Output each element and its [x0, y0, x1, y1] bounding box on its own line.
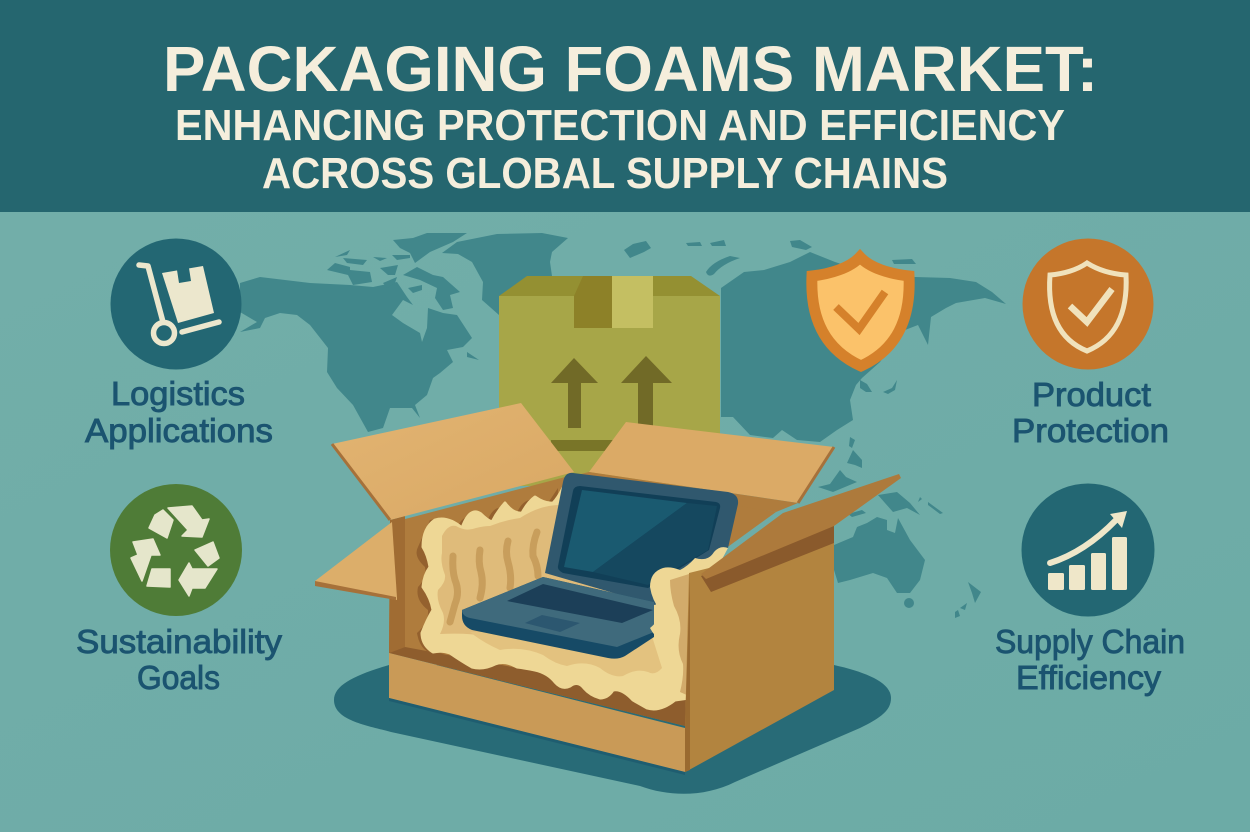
back left flap: [332, 403, 574, 520]
right flap: [701, 474, 901, 579]
world map: [240, 233, 1006, 618]
foam folds: [450, 532, 538, 622]
foam under laptop: [470, 630, 662, 676]
up arrows: [551, 356, 672, 451]
shield icon: [812, 257, 909, 366]
label: Supply Chain: [995, 623, 1185, 660]
ground shadow: [334, 665, 891, 794]
laptop base: [462, 577, 654, 659]
label: Sustainability: [76, 623, 283, 660]
right flap shade: [701, 524, 834, 592]
title line 1: PACKAGING FOAMS MARKET:: [163, 33, 1098, 105]
title line 2: ENHANCING PROTECTION AND EFFICIENCY: [175, 101, 1065, 150]
label: Applications: [85, 412, 273, 449]
light tape: [612, 276, 653, 328]
label: [1012, 376, 1169, 449]
label: Efficiency: [1016, 659, 1162, 696]
back right flap: [589, 422, 834, 503]
label: Protection: [1012, 412, 1169, 449]
label: [76, 623, 283, 696]
left side flap: [315, 522, 397, 600]
box interior: [389, 475, 776, 727]
icon: shield check: [1022, 238, 1154, 370]
label: Logistics: [111, 375, 245, 412]
title: [163, 33, 1098, 198]
touchpad: [525, 615, 580, 632]
screen glare: [564, 490, 687, 572]
title line 3: ACROSS GLOBAL SUPPLY CHAINS: [262, 149, 948, 198]
foam back: [422, 488, 689, 709]
box top: [499, 276, 720, 296]
banner: [0, 0, 1250, 212]
box right wall: [685, 537, 834, 772]
icon: hand cart: [110, 238, 242, 370]
open cardboard box with laptop: [315, 403, 901, 794]
icon: growth chart: [1022, 484, 1154, 616]
icon: recycle: [110, 484, 242, 616]
label: Product: [1032, 376, 1151, 413]
foam shadow: [417, 488, 558, 654]
foam inner: [438, 505, 650, 650]
panel: sustainability goals: [76, 484, 283, 696]
label: Goals: [137, 659, 220, 696]
foam right piece: [650, 547, 728, 700]
label: [85, 375, 273, 449]
dark tape: [574, 276, 612, 328]
background: [0, 212, 1250, 832]
panel: product protection: [1012, 238, 1169, 449]
laptop screen: [545, 473, 738, 605]
background shipping box: [499, 276, 720, 486]
laptop: [462, 473, 738, 659]
keyboard: [507, 584, 653, 623]
panel: logistics applications: [85, 238, 273, 449]
panel: supply chain efficiency: [995, 484, 1185, 696]
label: [995, 623, 1185, 696]
box front: [499, 296, 720, 486]
box front panel: [389, 653, 685, 772]
interior floor: [389, 647, 689, 727]
